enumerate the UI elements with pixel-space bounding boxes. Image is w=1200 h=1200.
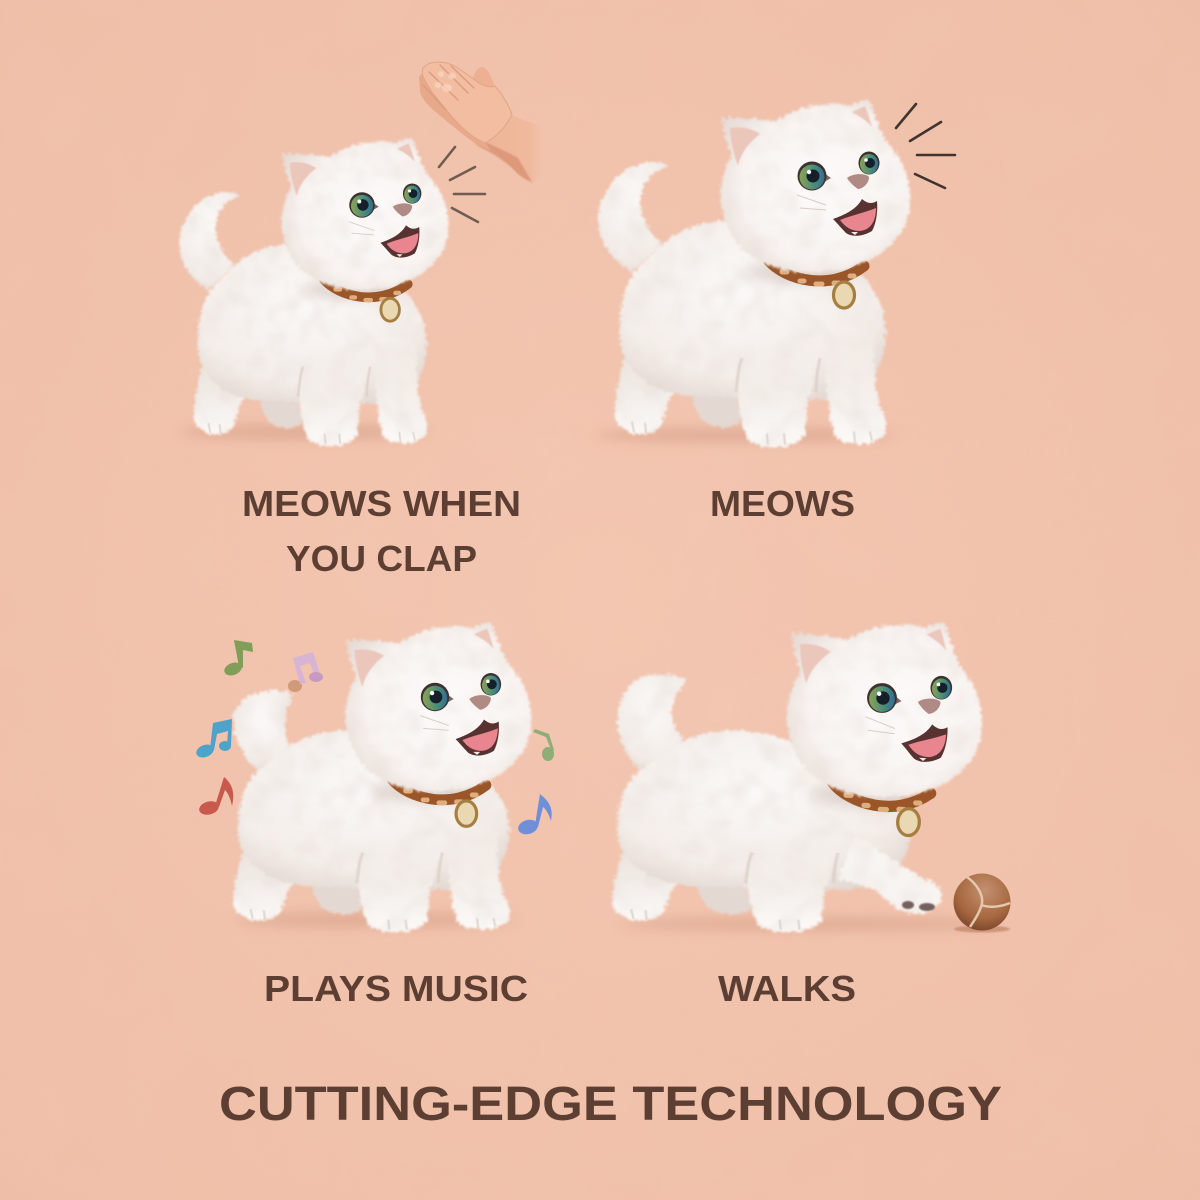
body and legs xyxy=(234,730,510,932)
front hand xyxy=(422,62,512,143)
head with collar xyxy=(721,100,910,308)
title: CUTTING-EDGE TECHNOLOGY xyxy=(219,1078,1002,1131)
ball xyxy=(954,874,1010,932)
thumb xyxy=(473,67,495,90)
tail xyxy=(598,162,670,272)
tail xyxy=(617,675,688,770)
ground shadow xyxy=(235,913,515,927)
back hand xyxy=(419,73,490,150)
label: plays music: PLAYS MUSIC xyxy=(264,968,528,1009)
body and legs xyxy=(194,244,428,446)
head with collar xyxy=(346,623,531,826)
label: meows when you clap: YOU CLAP xyxy=(286,538,477,579)
extended front leg xyxy=(838,835,942,914)
kitten 3: plays music xyxy=(234,623,531,932)
kitten 2: meows xyxy=(595,100,910,448)
label: meows: MEOWS xyxy=(710,483,855,524)
note: blue xyxy=(194,719,232,760)
sound lines: kitten 2 xyxy=(896,104,955,188)
tail xyxy=(234,690,294,772)
ground shadow xyxy=(620,918,1000,930)
kitten 4: walks xyxy=(613,615,1000,932)
note: green xyxy=(222,640,253,678)
label: meows when you clap xyxy=(242,483,521,579)
body and legs xyxy=(613,730,910,932)
note: lilac xyxy=(288,652,323,692)
hand clapping xyxy=(419,62,546,184)
head with collar xyxy=(282,138,448,321)
head with collar xyxy=(781,615,987,839)
sound lines: kitten 1 xyxy=(439,147,485,222)
label: walks: WALKS xyxy=(718,968,856,1009)
label: meows when you clap: MEOWS WHEN xyxy=(242,483,521,524)
note: periwinkle xyxy=(517,794,552,836)
arm xyxy=(482,115,546,184)
note: small green xyxy=(533,729,554,761)
note: red xyxy=(198,777,233,817)
kitten 1: meows when you clap xyxy=(179,138,448,446)
tail xyxy=(179,192,241,290)
ground shadow xyxy=(180,425,430,439)
body and legs xyxy=(616,221,887,448)
music notes xyxy=(194,640,554,836)
ground shadow xyxy=(595,428,895,442)
knuckles xyxy=(434,71,456,92)
